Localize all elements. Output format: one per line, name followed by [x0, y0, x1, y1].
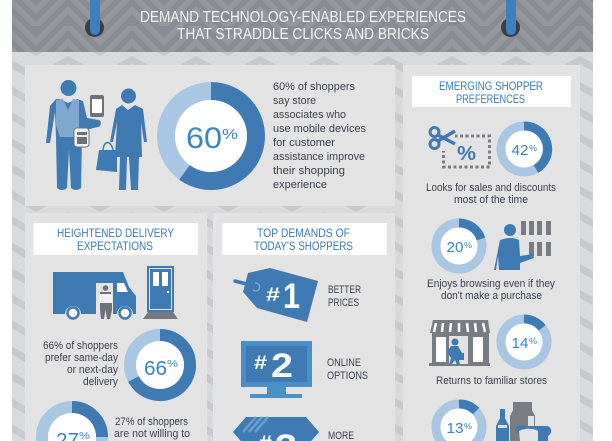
- icon: browsing shopper: [494, 221, 551, 270]
- icon: left hanging strap: [85, 0, 104, 37]
- donut chart: 20%: [436, 223, 482, 269]
- text: enjoys browsing: [427, 278, 555, 302]
- donut chart: 66%: [130, 335, 190, 395]
- icon: price tag #1: 1: [283, 277, 300, 316]
- donut chart: 42%: %: [529, 144, 537, 153]
- text: familiar stores: Returns to familiar stores: [436, 375, 547, 387]
- text: 60% of shoppers: use mobile devices: [273, 123, 366, 135]
- text: 27% of shoppers: [114, 416, 190, 440]
- text: 60% of shoppers: associates who: [273, 109, 346, 121]
- donut chart: 60%: 60: [186, 122, 222, 155]
- text: 27% of shoppers: 27% of shoppers: [115, 416, 188, 428]
- label: better prices: [328, 284, 361, 309]
- donut chart: 42%: [501, 126, 548, 172]
- text: 60% of shoppers: their shopping: [273, 165, 345, 177]
- text: enjoys browsing: don't make a purchase: [441, 290, 542, 302]
- panel: heightened delivery expectations: [25, 213, 207, 441]
- icon: associate and shopper: [46, 80, 147, 190]
- donut chart: 27%: [42, 407, 102, 441]
- header band: [12, 0, 593, 52]
- heading: emerging: [412, 76, 571, 107]
- text: sales and discounts: [426, 182, 556, 206]
- donut chart: 14%: 14: [512, 335, 528, 352]
- heading: top demands: TOP DEMANDS OF: [257, 226, 350, 240]
- text: 27% of shoppers: are not willing to: [114, 428, 190, 440]
- icon: monitor #2: 2: [271, 347, 293, 385]
- heading: top demands: [222, 223, 387, 255]
- heading: emerging: PREFERENCES: [456, 92, 525, 106]
- label: better prices: PRICES: [328, 297, 359, 309]
- icon: price tag #1: [235, 268, 318, 322]
- panel: top demands: [213, 213, 395, 441]
- text: 60% of shoppers: for customer: [273, 137, 335, 149]
- donut chart: 14%: [501, 319, 547, 365]
- text: 60% of shoppers: 60% of shoppers: [273, 81, 355, 93]
- donut chart: 20%: 20: [446, 239, 464, 256]
- icon: monitor #2: [241, 341, 312, 398]
- heading: delivery: [34, 223, 198, 255]
- label: online options: OPTIONS: [327, 370, 368, 382]
- label: online options: [327, 357, 368, 382]
- title: DEMAND TECHNOLOGY-ENABLED EXPERIENCES: [140, 9, 466, 26]
- heading: delivery: HEIGHTENED DELIVERY: [57, 226, 174, 240]
- icon: monitor #2: #: [254, 353, 268, 374]
- icon: groceries: [496, 402, 551, 441]
- icon: right hanging strap: [501, 0, 520, 37]
- donut chart: 60%: [166, 91, 256, 181]
- icon: delivery truck and door: [53, 266, 178, 319]
- panel: store associates: [25, 65, 395, 206]
- text: 60% of shoppers: [273, 81, 366, 191]
- heading: delivery: EXPECTATIONS: [77, 239, 153, 253]
- donut chart: 13%: [436, 404, 482, 441]
- text: 66% of shoppers: prefer same-day: [45, 352, 118, 364]
- donut chart: 60%: %: [222, 126, 238, 143]
- text: sales and discounts: Looks for sales and discounts: [426, 182, 556, 194]
- text: 66% of shoppers: delivery: [83, 376, 118, 388]
- donut chart: 66%: %: [167, 359, 178, 370]
- text: 66% of shoppers: or next-day: [67, 364, 118, 376]
- icon: storefront: [429, 320, 490, 366]
- donut chart: 13%: %: [464, 422, 472, 431]
- label: better prices: BETTER: [328, 284, 361, 296]
- title: [140, 9, 466, 43]
- donut chart: 66%: 66: [144, 358, 167, 380]
- donut chart: 14%: %: [529, 337, 537, 346]
- text: 60% of shoppers: experience: [273, 179, 327, 191]
- label: online options: ONLINE: [327, 357, 361, 369]
- title: THAT STRADDLE CLICKS AND BRICKS: [177, 26, 429, 43]
- heading: top demands: TODAY'S SHOPPERS: [254, 239, 353, 253]
- donut chart: 13%: 13: [446, 420, 464, 437]
- donut chart: 42%: 42: [512, 142, 528, 159]
- text: 60% of shoppers: say store: [273, 95, 316, 107]
- text: 60% of shoppers: assistance improve: [273, 151, 365, 163]
- text: enjoys browsing: Enjoys browsing even if they: [427, 278, 555, 290]
- icon: hexagon #3: [233, 417, 319, 441]
- icon: coupon scissors: [429, 124, 490, 167]
- icon: price tag #1: #: [266, 285, 281, 306]
- text: 66% of shoppers: 66% of shoppers: [43, 340, 118, 352]
- panel: emerging shopper preferences: [403, 65, 580, 441]
- text: sales and discounts: most of the time: [454, 194, 528, 206]
- text: 66% of shoppers: [43, 340, 118, 388]
- icon: coupon scissors: %: [457, 143, 476, 165]
- donut chart: 20%: %: [464, 241, 472, 250]
- heading: emerging: EMERGING SHOPPER: [439, 79, 543, 93]
